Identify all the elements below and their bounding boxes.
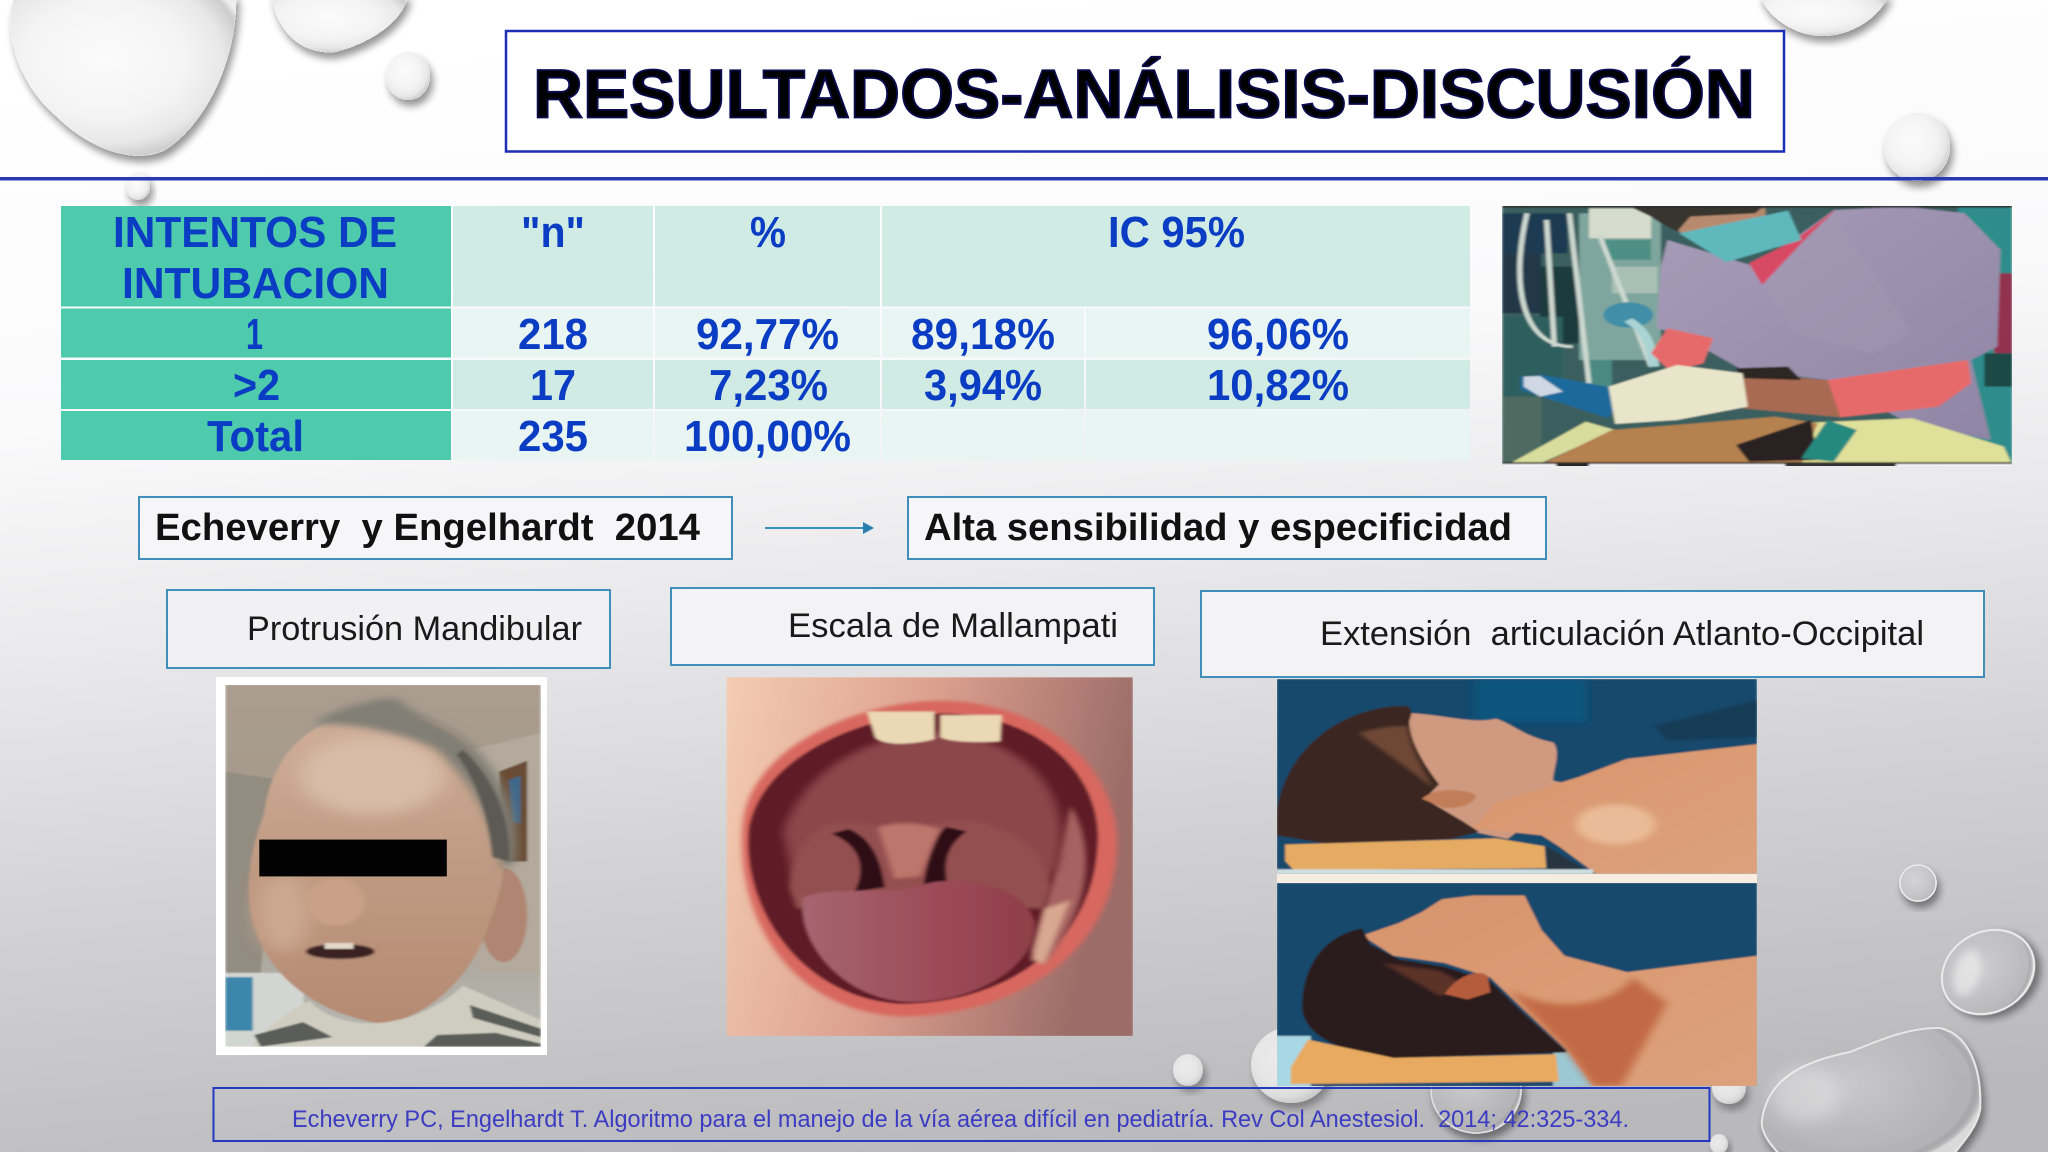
callout: study reference: [139, 497, 732, 559]
table: intentos de intubacion: >2: [233, 361, 280, 410]
table: intentos de intubacion: 92,77%: [696, 310, 839, 359]
label: protrusion mandibular: [167, 590, 610, 668]
citation: [214, 1088, 1710, 1141]
citation: Echeverry PC, Engelhardt T. Algoritmo para el manejo de la vía aérea difícil en pediatría. Rev Col Anestesiol. 2014; 42:325-334.: [292, 1106, 1629, 1133]
table: intentos de intubacion: 7,23%: [709, 361, 828, 410]
label: protrusion mandibular: Protrusión Mandibular: [247, 610, 582, 648]
table: intentos de intubacion: 235: [518, 412, 588, 461]
label: extension atlanto-occipital: [1201, 591, 1984, 677]
photo: open mouth mallampati: [726, 677, 1133, 1036]
table: intentos de intubacion: 1: [246, 310, 263, 359]
table: intentos de intubacion: 10,82%: [1207, 361, 1349, 410]
table: intentos de intubacion: 17: [530, 361, 576, 410]
table: intentos de intubacion: INTUBACION: [122, 259, 389, 308]
photo: neck extension, top: [1277, 679, 1757, 874]
callout: high sensitivity: Alta sensibilidad y especificidad: [924, 507, 1512, 549]
table: intentos de intubacion: 3,94%: [924, 361, 1042, 410]
table: intentos de intubacion: IC 95%: [1108, 208, 1245, 257]
photo: neck extension, bottom: [1277, 883, 1757, 1086]
table: intentos de intubacion: 100,00%: [684, 412, 851, 461]
label: escala de mallampati: Escala de Mallampati: [788, 607, 1118, 645]
black eye bar: [259, 840, 447, 876]
label: extension atlanto-occipital: Extensión articulación Atlanto-Occipital: [1320, 615, 1924, 653]
callout: study reference: Echeverry y Engelhardt 2014: [155, 507, 700, 549]
table: intentos de intubacion: 218: [518, 310, 588, 359]
title: [506, 31, 1784, 152]
table: intentos de intubacion: 96,06%: [1207, 310, 1349, 359]
photo: intubation: [1502, 205, 2012, 467]
label: escala de mallampati: [671, 588, 1154, 665]
table: intentos de intubacion: [61, 206, 1470, 461]
title: RESULTADOS-ANÁLISIS-DISCUSIÓN: [533, 56, 1755, 132]
table: intentos de intubacion: INTENTOS DE: [113, 208, 397, 257]
callout: high sensitivity: [908, 497, 1546, 559]
photo: neck extension divider: [1277, 874, 1757, 883]
table: intentos de intubacion: Total: [207, 412, 304, 461]
table: intentos de intubacion: %: [750, 208, 786, 257]
arrow: [765, 522, 874, 534]
header rule: [0, 177, 2048, 180]
table: intentos de intubacion: 89,18%: [911, 310, 1055, 359]
table: intentos de intubacion: "n": [521, 208, 585, 257]
photo: child with eyes covered: [216, 677, 547, 1055]
